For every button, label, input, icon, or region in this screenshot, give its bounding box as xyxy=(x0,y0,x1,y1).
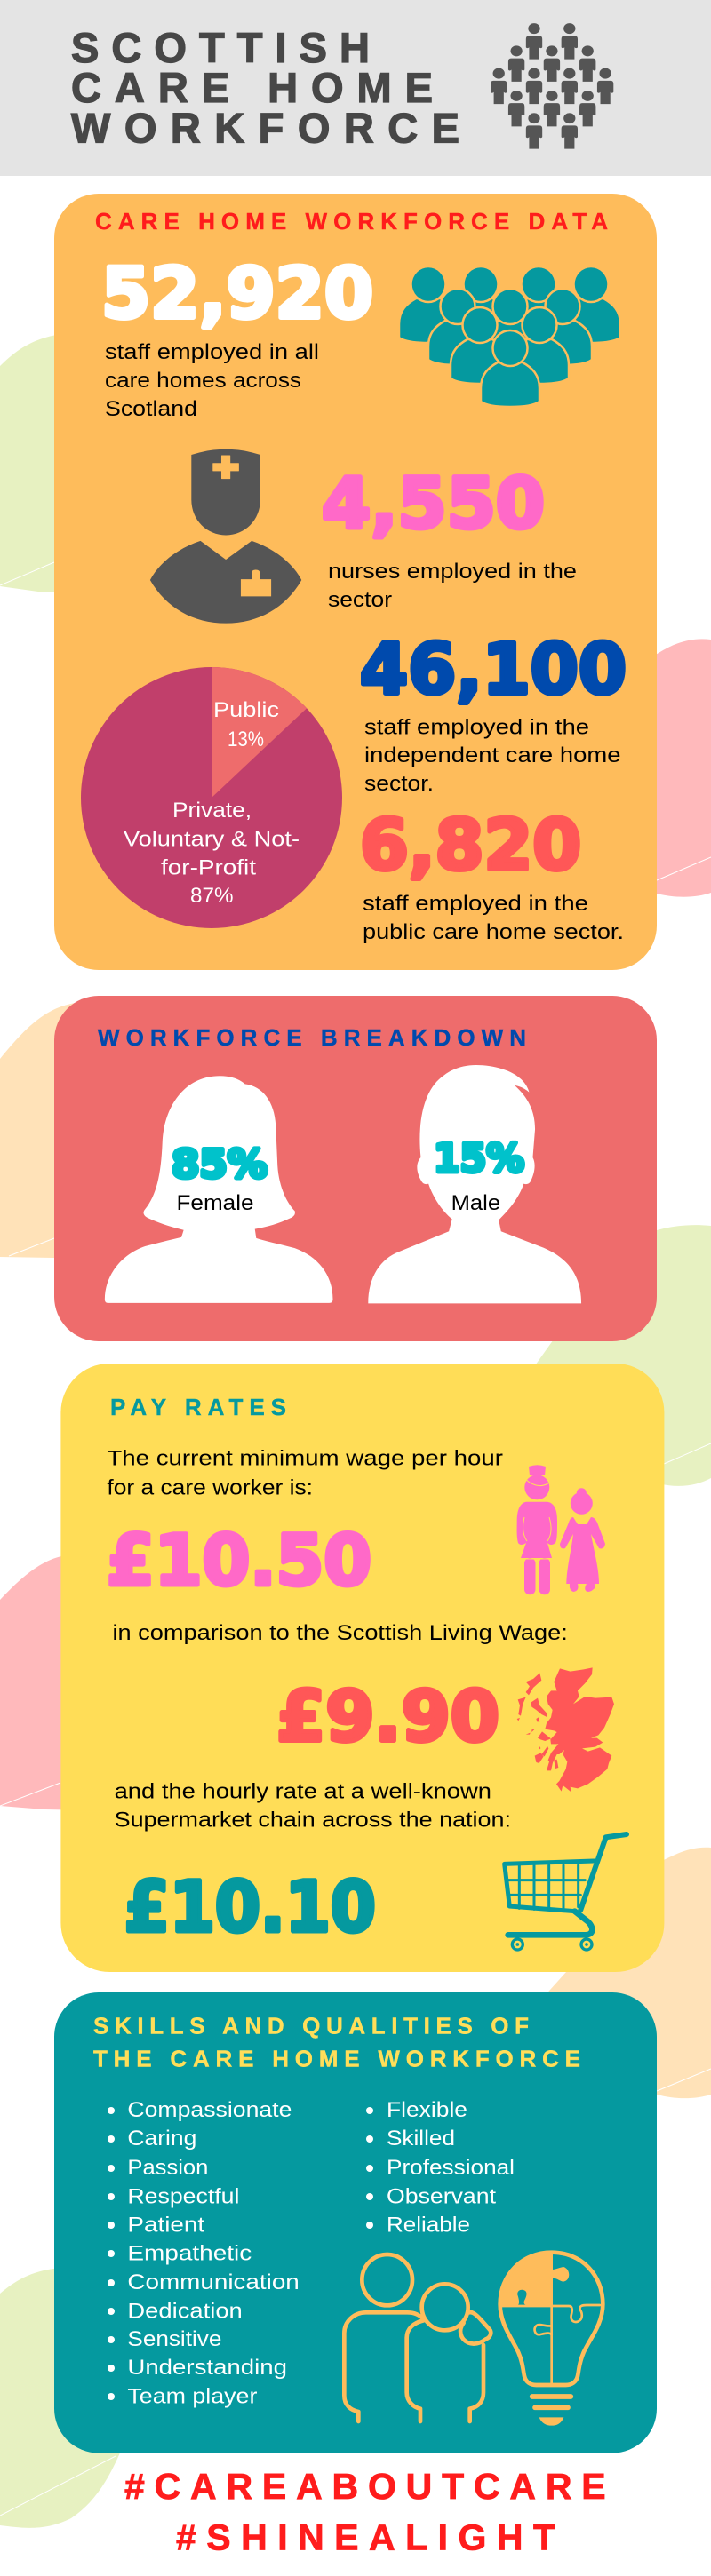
hashtags xyxy=(124,2466,606,2558)
icon: female silhouette xyxy=(105,1076,332,1303)
title xyxy=(71,24,459,152)
label: male: Male xyxy=(451,1191,500,1215)
list: skills column two: Reliable xyxy=(387,2214,470,2237)
text: independent sector: sector. xyxy=(364,772,434,796)
stat: 4,550: 4,550 xyxy=(322,465,545,545)
text: supermarket comparison xyxy=(115,1780,511,1832)
pie chart: public vs private: Private, xyxy=(172,799,252,823)
text: public sector: staff employed in the xyxy=(363,892,588,916)
text: minimum wage intro: for a care worker is: xyxy=(107,1476,313,1500)
list: skills column one: Empathetic xyxy=(127,2242,252,2266)
text: staff employed in all care homes: care homes across xyxy=(105,369,301,393)
pie chart: public vs private: 13% xyxy=(228,727,264,751)
pie chart: public vs private xyxy=(81,667,342,928)
list: skills column two: Flexible xyxy=(387,2098,467,2122)
text: supermarket comparison: Supermarket chain across the nation: xyxy=(115,1808,511,1832)
pie chart: public vs private: for-Profit xyxy=(161,856,256,880)
hashtags: #SHINEALIGHT xyxy=(176,2517,555,2558)
stat: 85%: 85% xyxy=(172,1142,268,1187)
header band xyxy=(0,0,711,176)
icon: shopping trolley xyxy=(505,1834,627,1950)
list: skills column one: Sensitive xyxy=(127,2327,221,2351)
text: nurses employed xyxy=(328,560,577,612)
panel: pay rates xyxy=(60,1364,664,1972)
list: skills column one: Caring xyxy=(127,2127,196,2151)
text: nurses employed: sector xyxy=(328,588,392,612)
text: staff employed in all care homes xyxy=(105,340,319,421)
stat: £10.10: £10.10 xyxy=(124,1868,376,1948)
stat: £10.50: £10.50 xyxy=(107,1522,371,1602)
list: skills column two: Professional xyxy=(387,2156,515,2180)
icon: nurse xyxy=(150,449,301,624)
text: public sector: public care home sector. xyxy=(363,920,624,944)
stat: 52,920: 52,920 xyxy=(101,254,373,334)
heading: workforce breakdown: WORKFORCE BREAKDOWN xyxy=(98,1024,526,1051)
stat: £9.90: £9.90 xyxy=(276,1678,499,1758)
stat: 15%: 15% xyxy=(434,1136,524,1181)
text: minimum wage intro: The current minimum wage per hour xyxy=(107,1447,503,1471)
stat: 6,820: 6,820 xyxy=(360,807,581,886)
panel: skills and qualities xyxy=(54,1992,657,2453)
hashtags: #CAREABOUTCARE xyxy=(124,2466,606,2507)
text: minimum wage intro xyxy=(107,1447,503,1500)
title: CARE HOME xyxy=(71,64,433,111)
panel: care home workforce data xyxy=(54,194,657,970)
panel: workforce breakdown xyxy=(54,996,657,1341)
list: skills column two: Observant xyxy=(387,2184,496,2208)
list: skills column one: Dedication xyxy=(127,2299,243,2323)
text: nurses employed: nurses employed in the xyxy=(328,560,577,584)
icon: two people comforting xyxy=(344,2254,491,2421)
list: skills column one: Understanding xyxy=(127,2356,287,2380)
text: staff employed in all care homes: staff employed in all xyxy=(105,340,319,364)
icon: crowd of small people xyxy=(491,23,613,149)
text: staff employed in all care homes: Scotland xyxy=(105,397,197,421)
list: skills column one: Patient xyxy=(127,2214,204,2237)
title: WORKFORCE xyxy=(71,105,459,152)
list: skills column one: Communication xyxy=(127,2270,300,2294)
text: living wage comparison: in comparison to the Scottish Living Wage: xyxy=(112,1621,568,1645)
list: skills column one xyxy=(108,2098,300,2408)
heading: skills and qualities: THE CARE HOME WORKFORCE xyxy=(93,2045,580,2071)
icon: map of Scotland xyxy=(517,1667,614,1792)
icon: male silhouette xyxy=(368,1065,581,1303)
list: skills column two xyxy=(366,2098,515,2237)
stat: 46,100: 46,100 xyxy=(360,631,627,711)
pie chart: public vs private: 87% xyxy=(190,884,233,908)
icon: jigsaw lightbulb xyxy=(500,2253,603,2426)
list: skills column one: Team player xyxy=(127,2384,257,2408)
heading: skills and qualities: SKILLS AND QUALITIES OF xyxy=(93,2012,529,2039)
icon: group of teal people xyxy=(399,266,620,407)
pie chart: public vs private: Public xyxy=(213,698,279,722)
list: skills column one: Passion xyxy=(127,2156,208,2180)
title: SCOTTISH xyxy=(71,24,370,71)
text: independent sector: staff employed in the xyxy=(364,716,589,739)
heading: care home workforce data: CARE HOME WORKFORCE DATA xyxy=(95,208,608,235)
label: female: Female xyxy=(176,1191,254,1215)
heading: pay rates: PAY RATES xyxy=(110,1394,286,1420)
pie chart: public vs private: Voluntary & Not- xyxy=(124,828,300,851)
text: supermarket comparison: and the hourly rate at a well-known xyxy=(115,1780,491,1804)
list: skills column one: Compassionate xyxy=(127,2098,292,2122)
list: skills column one: Respectful xyxy=(127,2184,239,2208)
heading: skills and qualities xyxy=(93,2012,580,2071)
text: independent sector: independent care home xyxy=(364,743,620,767)
icon: nurse and resident xyxy=(517,1465,605,1594)
list: skills column two: Skilled xyxy=(387,2127,455,2151)
text: independent sector xyxy=(364,716,620,796)
text: public sector xyxy=(363,892,624,944)
